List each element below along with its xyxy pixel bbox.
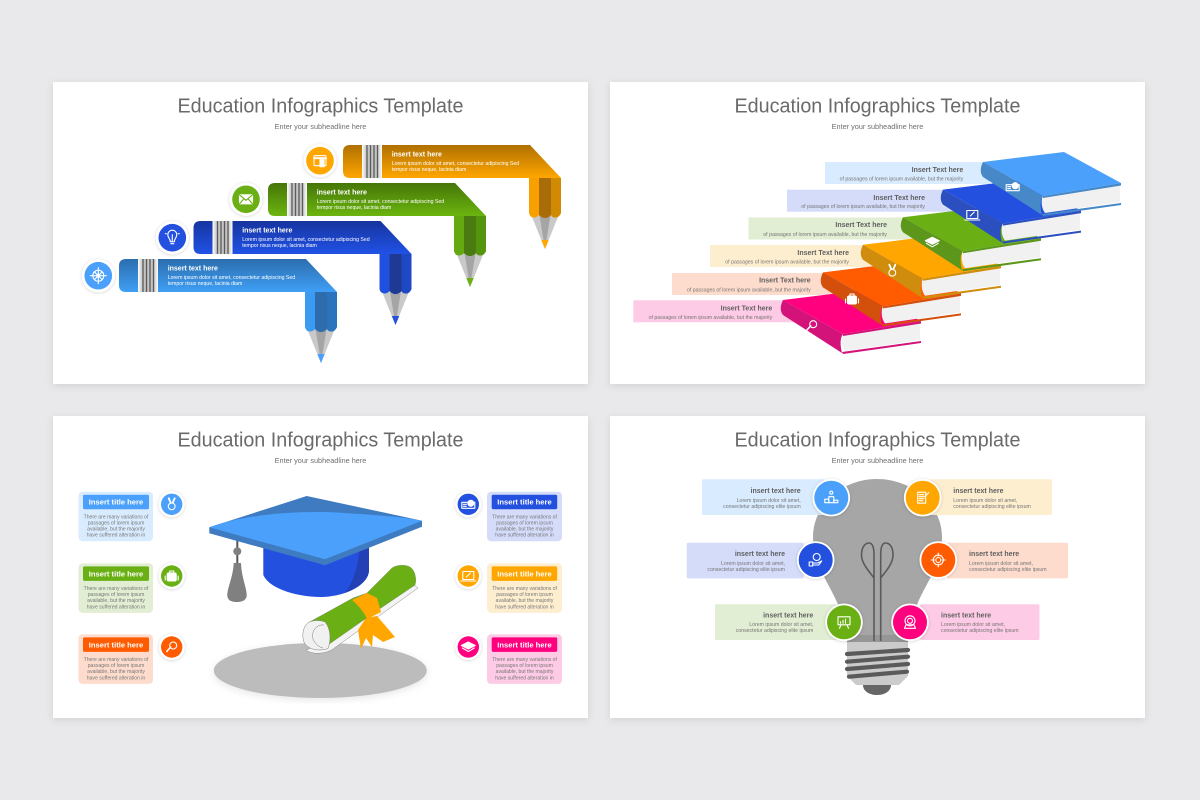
pencil 4: orange: insert text here	[392, 152, 442, 158]
callout: left 1: passages of lorem ipsum	[88, 520, 144, 526]
book label 2: Insert Text here	[873, 195, 925, 202]
icon: hand coin	[797, 541, 834, 579]
callout: right 1: Insert title here	[497, 498, 552, 507]
pencil 4: orange: Lorem ipsum dolor sit amet, consectetur adipiscing Sed	[392, 161, 519, 167]
callout: right 2: passages of lorem ipsum	[496, 592, 553, 598]
callout: left 3	[78, 634, 153, 684]
subheading: pencils: Enter your subheadline here	[275, 122, 366, 131]
heading: cap: Education Infographics Template	[178, 430, 464, 452]
text box: left 1: consectetur adipiscing elite ipsum	[723, 504, 801, 510]
icon: medal badge	[159, 491, 185, 517]
book 1: light blue	[981, 152, 1121, 216]
pencil 3: green: Lorem ipsum dolor sit amet, consectetur adipiscing Sed	[317, 199, 444, 205]
text box: left 3: consectetur adipiscing elite ipsum	[736, 628, 813, 634]
text box: left 3: Lorem ipsum dolor sit amet,	[749, 622, 813, 628]
pencil 3: green: tempor risus neque, lacinia diam	[317, 205, 391, 211]
book label 5: of passages of lorem ipsum available, but the majority	[687, 288, 811, 294]
icon: podium	[812, 479, 850, 516]
book 5: red-orange	[821, 262, 961, 326]
book label 5	[672, 273, 837, 295]
graduation cap	[209, 496, 422, 602]
icon: laptop badge	[455, 563, 481, 589]
icon: wheel	[82, 259, 115, 292]
text box: right 2: insert text here	[969, 551, 1019, 558]
callout: left 3: Insert title here	[89, 640, 143, 649]
subheading: books: Enter your subheadline here	[832, 122, 923, 131]
callout: left 2: Insert title here	[89, 569, 143, 578]
callout: left 1	[78, 492, 153, 541]
book label 3	[748, 218, 914, 240]
callout: right 1	[487, 492, 562, 541]
icon: mail	[230, 183, 262, 216]
callout: right 1: available, but the majority	[496, 526, 554, 532]
callout: left 3: passages of lorem ipsum	[88, 663, 144, 669]
book label 4	[710, 245, 875, 267]
book label 2	[787, 190, 952, 212]
text box: right 3	[920, 604, 1040, 640]
callout: right 3: available, but the majority	[496, 669, 554, 675]
ground shadow	[214, 643, 427, 698]
text box: right 2: Lorem ipsum dolor sit amet,	[969, 561, 1033, 567]
callout: left 2: There are many variations of	[84, 586, 149, 592]
text box: right 1: insert text here	[953, 488, 1004, 495]
text box: left 2	[687, 543, 804, 578]
icon: magnifier badge	[159, 634, 185, 660]
icon: browser	[304, 144, 336, 177]
pencil 2: dark blue: insert text here	[242, 228, 292, 234]
text box: left 2: Lorem ipsum dolor sit amet,	[721, 561, 785, 567]
text box: left 3	[715, 604, 840, 640]
book 2: dark blue	[941, 180, 1081, 244]
icon: projector badge	[455, 491, 481, 517]
heading: bulb: Education Infographics Template	[734, 430, 1020, 452]
callout: right 3	[487, 634, 562, 684]
text box: left 3: insert text here	[763, 612, 813, 620]
heading: books: Education Infographics Template	[734, 96, 1020, 118]
panel: books	[610, 82, 1145, 384]
callout: right 3: Insert title here	[497, 640, 552, 649]
callout: right 1: have suffered alteration in	[495, 533, 554, 539]
callout: left 3: available, but the majority	[87, 669, 145, 675]
pencil 1: light blue: Lorem ipsum dolor sit amet, consectetur adipiscing Sed	[168, 275, 295, 281]
callout: left 3: have suffered alteration in	[87, 675, 145, 681]
icon: cap badge	[455, 634, 481, 660]
pencil 3: green	[268, 183, 486, 287]
panel: light bulb	[610, 416, 1145, 718]
book label 4: Insert Text here	[797, 250, 849, 257]
pencil 2: dark blue: tempor risus neque, lacinia diam	[242, 243, 317, 249]
callout: right 3: have suffered alteration in	[495, 675, 554, 681]
callout: left 3: There are many variations of	[84, 657, 149, 663]
callout: left 2	[78, 563, 153, 613]
text box: left 1: insert text here	[751, 488, 801, 495]
icon: light bulb	[156, 221, 189, 254]
pencil 1: light blue: insert text here	[168, 266, 218, 272]
text box: right 1	[930, 479, 1052, 515]
callout: left 2: available, but the majority	[87, 598, 145, 604]
icon: presentation board	[825, 604, 863, 641]
book 4: orange	[861, 235, 1001, 299]
pencil 2: dark blue	[194, 221, 412, 325]
icon: webcam	[891, 604, 929, 641]
callout: right 3: passages of lorem ipsum	[496, 663, 553, 669]
callout: left 2: passages of lorem ipsum	[88, 592, 144, 598]
book 3: green	[901, 207, 1041, 271]
text box: left 1	[702, 479, 825, 515]
icon: notes	[904, 479, 942, 516]
icon: backpack	[846, 294, 858, 304]
icon: magnifier	[807, 321, 817, 330]
panel: graduation cap	[53, 416, 588, 718]
callout: right 2: have suffered alteration in	[495, 604, 554, 610]
pencil 4: orange: tempor risus neque, lacinia diam	[392, 167, 466, 173]
callout: left 1: have suffered alteration in	[87, 533, 145, 539]
callout: right 3: There are many variations of	[492, 657, 557, 663]
text box: right 2	[947, 543, 1068, 578]
text box: left 2: consectetur adipiscing elite ipsum	[707, 567, 785, 573]
pencil 1: light blue: tempor risus neque, lacinia diam	[168, 281, 242, 287]
text box: right 2: consectetur adipiscing elite ipsum	[969, 567, 1047, 573]
subheading: cap: Enter your subheadline here	[275, 456, 366, 465]
icon: target	[920, 541, 957, 579]
book label 1: Insert Text here	[912, 167, 963, 174]
callout: left 1: available, but the majority	[87, 526, 145, 532]
book label 4: of passages of lorem ipsum available, but the majority	[725, 260, 849, 266]
callout: right 2: available, but the majority	[496, 598, 554, 604]
subheading: bulb: Enter your subheadline here	[832, 456, 923, 465]
book label 1	[825, 162, 990, 184]
diploma	[303, 565, 418, 653]
text box: right 3: consectetur adipiscing elite ipsum	[941, 628, 1019, 634]
book label 3: Insert Text here	[835, 222, 887, 229]
text box: right 1: Lorem ipsum dolor sit amet,	[953, 498, 1017, 504]
text box: right 3: insert text here	[941, 612, 991, 620]
callout: left 1: Insert title here	[89, 498, 143, 507]
icon: medal	[889, 265, 896, 276]
heading: pencils: Education Infographics Template	[178, 96, 464, 118]
book label 6: of passages of lorem ipsum available, but the majority	[649, 315, 773, 321]
text box: right 1: consectetur adipiscing elite ipsum	[953, 504, 1031, 510]
book label 6	[633, 300, 798, 322]
icon: projector	[1006, 183, 1019, 191]
icon: backpack badge	[159, 563, 185, 589]
icon: stacked cap	[925, 237, 939, 247]
light bulb	[813, 479, 942, 695]
callout: left 1: There are many variations of	[84, 514, 149, 520]
book label 3: of passages of lorem ipsum available, but the majority	[763, 232, 887, 238]
callout: right 2: There are many variations of	[492, 586, 557, 592]
pencil 2: dark blue: Lorem ipsum dolor sit amet, consectetur adipiscing Sed	[242, 237, 370, 243]
book label 5: Insert Text here	[759, 278, 811, 285]
pencil 4: orange	[343, 145, 561, 249]
book label 2: of passages of lorem ipsum available, but the majority	[801, 204, 925, 210]
book 6: pink	[781, 290, 921, 354]
text box: right 3: Lorem ipsum dolor sit amet,	[941, 622, 1005, 628]
book label 6: Insert Text here	[721, 306, 772, 313]
callout: left 2: have suffered alteration in	[87, 604, 145, 610]
panel: pencils	[53, 82, 588, 384]
icon: laptop	[965, 210, 980, 220]
callout: right 2	[487, 563, 562, 613]
text box: left 2: insert text here	[735, 551, 785, 558]
book label 1: of passages of lorem ipsum available, but the majority	[840, 177, 964, 183]
text box: left 1: Lorem ipsum dolor sit amet,	[737, 498, 801, 504]
callout: right 1: passages of lorem ipsum	[496, 520, 553, 526]
callout: right 2: Insert title here	[497, 569, 552, 578]
callout: right 1: There are many variations of	[492, 514, 557, 520]
pencil 1: light blue	[119, 259, 337, 363]
pencil 3: green: insert text here	[317, 190, 367, 196]
